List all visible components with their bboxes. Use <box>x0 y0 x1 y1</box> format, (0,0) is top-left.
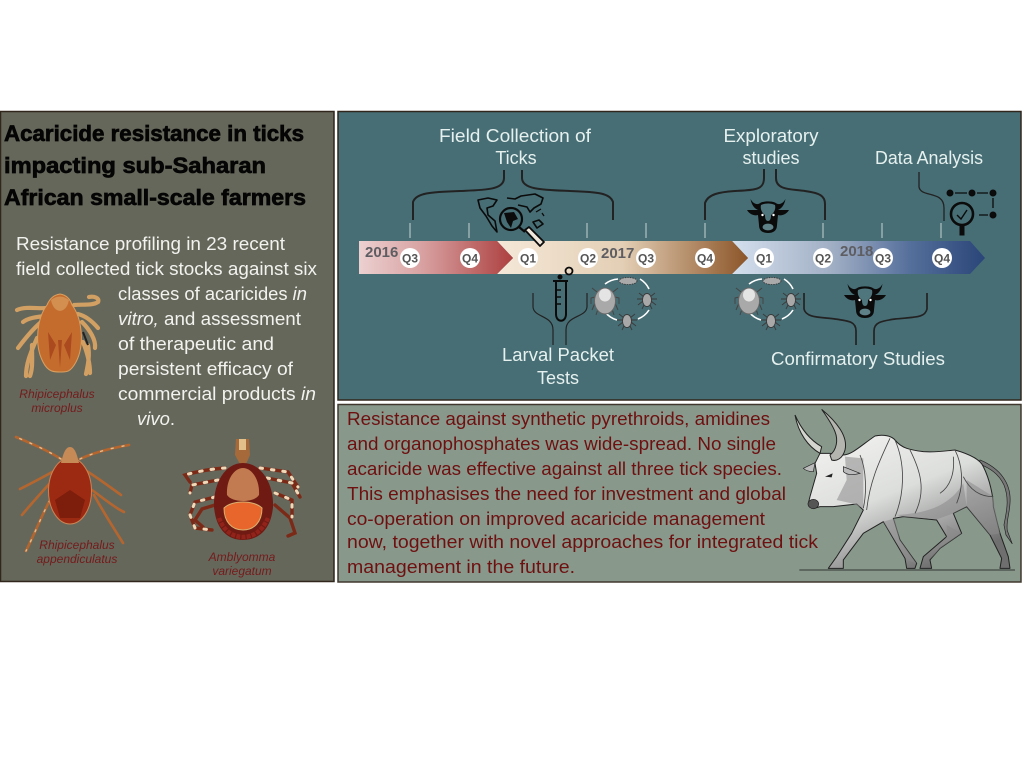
quarter markers: Q3 <box>875 252 891 266</box>
description text: classes of acaricides in <box>118 283 307 304</box>
heading: larval packet tests: Tests <box>537 368 579 388</box>
title: Acaricide resistance in ticks <box>4 121 304 146</box>
heading: field collection: Field Collection of <box>439 126 592 146</box>
panel: conclusion <box>338 404 1021 582</box>
heading: confirmatory studies: Confirmatory Studies <box>771 349 945 369</box>
quarter markers: Q4 <box>462 252 478 266</box>
label: Rhipicephalus appendiculatus: appendiculatus <box>37 552 117 566</box>
description text: persistent efficacy of <box>118 358 294 379</box>
quarter markers: Q2 <box>815 252 831 266</box>
label: Amblyomma variegatum <box>208 550 276 578</box>
conclusion text: management in the future. <box>347 556 575 577</box>
brace: exploratory studies <box>705 169 825 220</box>
description text: vivo. <box>137 408 175 429</box>
icon: world map and magnifier <box>478 194 544 246</box>
description text: of therapeutic and <box>118 333 274 354</box>
label: Amblyomma variegatum: Amblyomma <box>208 550 276 564</box>
quarter markers: Q2 <box>580 252 596 266</box>
panel: summary <box>0 112 334 582</box>
conclusion text: This emphasises the need for investment and global <box>347 483 786 504</box>
heading: exploratory studies: studies <box>742 148 800 168</box>
description text: field collected tick stocks against six <box>16 258 318 279</box>
title: African small-scale farmers <box>4 185 306 210</box>
label: Rhipicephalus appendiculatus <box>37 538 117 566</box>
title <box>4 121 306 210</box>
heading: exploratory studies: Exploratory <box>724 126 818 146</box>
conclusion text: acaricide was effective against all three tick species. <box>347 458 782 479</box>
conclusion text: now, together with novel approaches for integrated tick <box>347 531 819 552</box>
conclusion text: co-operation on improved acaricide management <box>347 508 765 529</box>
icon: tick life cycle left <box>591 278 657 330</box>
quarter markers: Q4 <box>697 252 713 266</box>
description text: Resistance profiling in 23 recent <box>16 233 285 254</box>
tick: Rhipicephalus appendiculatus <box>16 437 129 551</box>
label: Rhipicephalus microplus <box>19 387 95 415</box>
description text: commercial products in <box>118 383 316 404</box>
year labels: 2017 <box>601 245 634 262</box>
quarter markers: Q1 <box>756 252 772 266</box>
heading: field collection <box>439 126 592 168</box>
heading: data analysis: Data Analysis <box>875 148 983 168</box>
quarter markers: Q3 <box>402 252 418 266</box>
icon: test tube <box>553 268 572 321</box>
title: impacting sub-Saharan <box>4 153 266 178</box>
heading: larval packet tests: Larval Packet <box>502 345 614 365</box>
label: Rhipicephalus microplus: microplus <box>31 401 83 415</box>
conclusion text <box>347 408 819 577</box>
year labels: 2016 <box>365 244 398 261</box>
description text: vitro, and assessment <box>118 308 301 329</box>
icon: tick life cycle right <box>735 278 801 330</box>
description text <box>16 233 318 429</box>
quarter markers <box>400 248 952 268</box>
heading: larval packet tests <box>502 345 614 388</box>
conclusion text: and organophosphates was wide-spread. No single <box>347 433 776 454</box>
brace: confirmatory studies <box>804 293 927 345</box>
timeline bar <box>359 241 985 274</box>
heading: exploratory studies <box>724 126 818 168</box>
panel: timeline <box>338 112 1021 400</box>
conclusion text: Resistance against synthetic pyrethroids, amidines <box>347 408 770 429</box>
quarter markers: Q1 <box>520 252 536 266</box>
icon: cow confirmatory <box>844 284 886 318</box>
brace: field collection <box>413 170 613 220</box>
label: Rhipicephalus appendiculatus: Rhipicephalus <box>39 538 115 552</box>
brace: data analysis <box>919 172 944 221</box>
brace: larval packet tests <box>533 293 587 345</box>
year labels <box>365 243 873 262</box>
quarter markers: Q4 <box>934 252 950 266</box>
illustration: bull <box>795 409 1015 570</box>
icon: cow exploratory <box>747 199 789 233</box>
heading: field collection: Ticks <box>495 148 537 168</box>
year labels: 2018 <box>840 243 873 260</box>
icon: data analysis <box>947 190 996 235</box>
quarter ticks <box>410 223 941 238</box>
label: Rhipicephalus microplus: Rhipicephalus <box>19 387 95 401</box>
quarter markers: Q3 <box>638 252 654 266</box>
tick: Amblyomma variegatum <box>185 439 300 540</box>
tick: Rhipicephalus microplus <box>17 294 98 376</box>
label: Amblyomma variegatum: variegatum <box>212 564 272 578</box>
